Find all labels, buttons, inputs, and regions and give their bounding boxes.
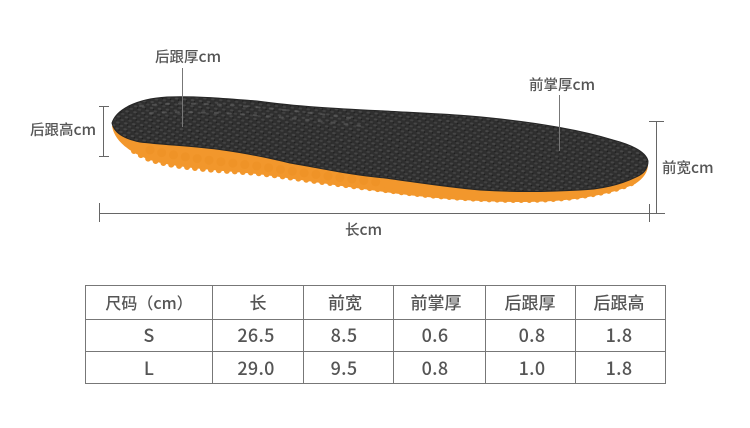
- dimension: length: [100, 203, 650, 240]
- insole illustration: [112, 97, 648, 202]
- label: forefoot width: 前宽cm: [662, 156, 714, 178]
- black mesh top layer: [112, 97, 648, 192]
- table header: [105, 289, 644, 314]
- dimension: forefoot width: [649, 122, 714, 214]
- dimension: heel height: [30, 106, 109, 156]
- table header: 后跟厚: [504, 289, 556, 314]
- dimension: heel thickness: [155, 45, 221, 127]
- table header: 前宽: [328, 289, 362, 314]
- row S: 26.5: [237, 322, 275, 348]
- dimension: forefoot thickness: [529, 73, 595, 151]
- label: length: 长cm: [345, 218, 382, 240]
- label: heel height: 后跟高cm: [30, 118, 96, 140]
- row L: 0.8: [422, 355, 448, 381]
- size table: [86, 286, 666, 384]
- orange foam sole: [112, 125, 648, 202]
- row L: 9.5: [331, 355, 357, 381]
- table header: 后跟高: [594, 289, 644, 314]
- row S: 8.5: [331, 322, 357, 348]
- row S: 0.8: [519, 322, 545, 348]
- table header: 前掌厚: [410, 289, 462, 314]
- table header: 长: [250, 289, 266, 314]
- row L: 29.0: [237, 355, 275, 381]
- row L: 1.8: [606, 355, 632, 381]
- row S: S: [143, 322, 155, 348]
- row L: 1.0: [519, 355, 545, 381]
- row L: [144, 355, 632, 381]
- row S: 1.8: [606, 322, 632, 348]
- row S: [143, 322, 632, 348]
- mesh highlights: [140, 104, 370, 127]
- row L: L: [144, 355, 154, 381]
- label: forefoot thickness: 前掌厚cm: [529, 73, 595, 95]
- table header: 尺码（cm）: [105, 290, 193, 314]
- label: heel thickness: 后跟厚cm: [155, 45, 221, 67]
- table grid: [86, 286, 666, 384]
- row S: 0.6: [422, 322, 448, 348]
